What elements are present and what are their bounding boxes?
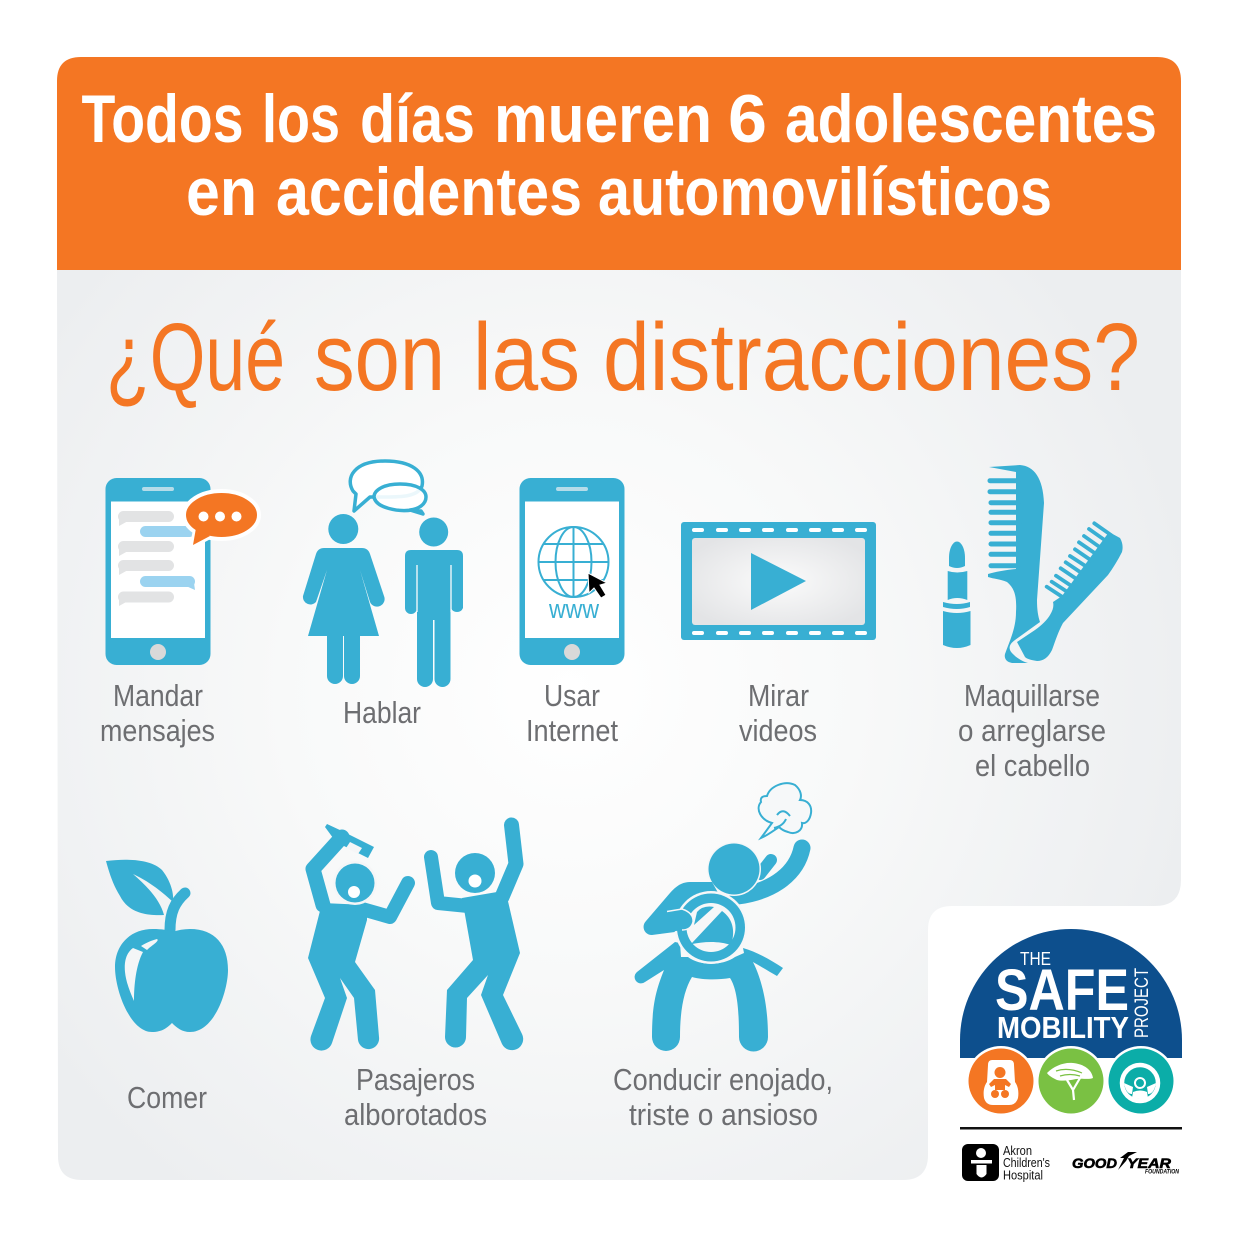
label: Maquillarse	[958, 678, 1106, 783]
logo: Goodyear Foundation: YEAR	[1127, 1155, 1172, 1171]
title: mueren	[494, 81, 712, 157]
icon: internet phone	[520, 478, 624, 665]
title: en	[186, 154, 257, 230]
icon: rowdy passengers	[308, 824, 523, 1051]
label: Conducir enojado: triste o ansioso	[629, 1097, 818, 1132]
label: Conducir enojado	[613, 1062, 833, 1132]
logo: Akron Children's Hospital: Hospital	[1003, 1168, 1043, 1182]
label: Mandar mensajes: Mandar	[113, 678, 203, 713]
heading	[106, 304, 1140, 411]
icon: apple	[106, 860, 228, 1032]
logo: Akron Children's Hospital: Akron	[1003, 1144, 1032, 1158]
icon: internet phone: www	[548, 594, 599, 624]
label: Usar Internet: Internet	[526, 713, 618, 748]
thought cloud	[759, 783, 811, 838]
label: Comer: Comer	[127, 1080, 207, 1115]
title: 6	[728, 81, 767, 157]
logo: The Safe Mobility Project: THE	[1020, 949, 1051, 969]
label: Maquillarse: el cabello	[975, 748, 1090, 783]
logo: Akron Children's Hospital	[962, 1144, 1050, 1182]
label: Conducir enojado: Conducir enojado,	[613, 1062, 833, 1097]
logo: The Safe Mobility Project: SAFE	[995, 958, 1129, 1023]
heading: distracciones?	[603, 304, 1140, 411]
icon: two people talking	[303, 461, 463, 687]
label: Maquillarse: Maquillarse	[964, 678, 1100, 713]
title	[82, 81, 1157, 230]
icon: bike helmet	[1036, 1046, 1106, 1116]
logo: The Safe Mobility Project: PROJECT	[1132, 968, 1153, 1038]
passenger with bottle	[308, 824, 408, 1051]
label: Mirar videos: videos	[739, 713, 817, 748]
icon: steering wheel	[1106, 1046, 1176, 1116]
label: Usar Internet: Usar	[544, 678, 600, 713]
heading: ¿Qué	[106, 304, 285, 411]
label: Mandar mensajes	[100, 678, 215, 748]
logo: Goodyear Foundation: FOUNDATION	[1145, 1170, 1180, 1176]
passenger with raised arms	[431, 825, 523, 1050]
logo: The Safe Mobility Project: MOBILITY	[997, 1010, 1129, 1045]
label: Mirar videos: Mirar	[748, 678, 809, 713]
label: Maquillarse: o arreglarse	[958, 713, 1106, 748]
label: Mandar mensajes: mensajes	[100, 713, 215, 748]
icon: angry driver	[635, 783, 811, 1051]
label: Pasajeros alborotados	[344, 1062, 487, 1132]
label: Pasajeros alborotados: Pasajeros	[356, 1062, 475, 1097]
logo: Goodyear Foundation: GOOD	[1072, 1155, 1117, 1171]
logo: Goodyear Foundation	[1072, 1152, 1180, 1176]
heading: las	[473, 304, 580, 411]
logo: The Safe Mobility Project	[960, 929, 1182, 1182]
title: accidentes	[276, 154, 582, 230]
heading: son	[314, 304, 445, 411]
label: Pasajeros alborotados: alborotados	[344, 1097, 487, 1132]
title: Todos	[82, 81, 244, 157]
icon: texting phone	[106, 478, 259, 665]
label: Usar Internet	[526, 678, 618, 748]
panel: orange header	[57, 57, 1181, 270]
icon: lipstick and combs	[943, 465, 1123, 663]
label: Mirar videos	[739, 678, 817, 748]
icon: child seat	[966, 1046, 1036, 1116]
title: adolescentes	[785, 81, 1157, 157]
label: Hablar: Hablar	[343, 695, 421, 730]
title: días	[360, 81, 475, 157]
title: automovilísticos	[598, 154, 1052, 230]
panel: grey background	[57, 268, 1181, 1180]
title: los	[262, 81, 340, 157]
logo: Akron Children's Hospital: Children's	[1003, 1156, 1050, 1170]
icon: video film strip	[681, 522, 876, 640]
